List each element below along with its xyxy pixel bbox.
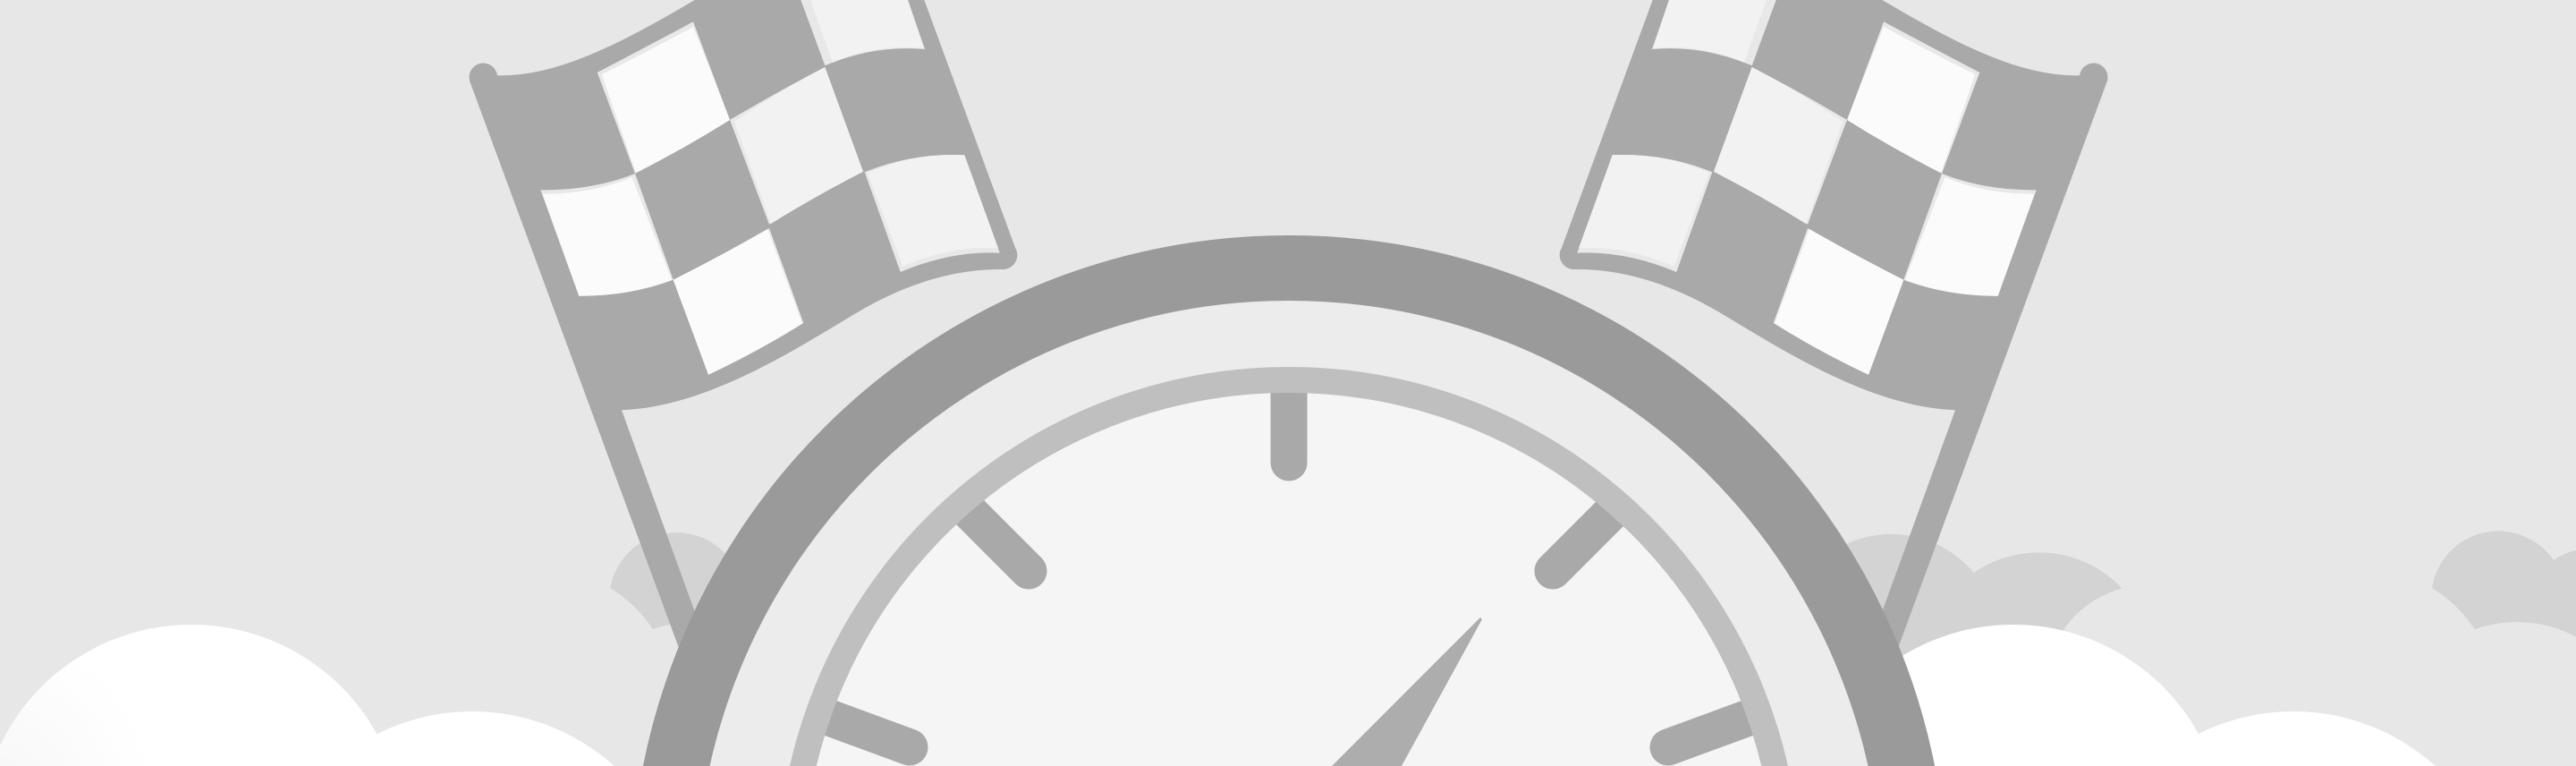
needle bbox=[1332, 617, 1482, 766]
background clouds: grey bbox=[610, 531, 2576, 716]
right checkered flag bbox=[1560, 0, 2107, 716]
dial face bbox=[791, 380, 1787, 766]
dial inner ring bbox=[791, 379, 1787, 766]
foreground cloud: right bbox=[1801, 625, 2505, 766]
left checkered flag bbox=[470, 0, 1017, 716]
foreground cloud: left bbox=[0, 625, 684, 766]
speedometer bbox=[664, 268, 1914, 766]
outer bezel ring bbox=[664, 268, 1914, 766]
tick marks bbox=[805, 376, 1773, 747]
